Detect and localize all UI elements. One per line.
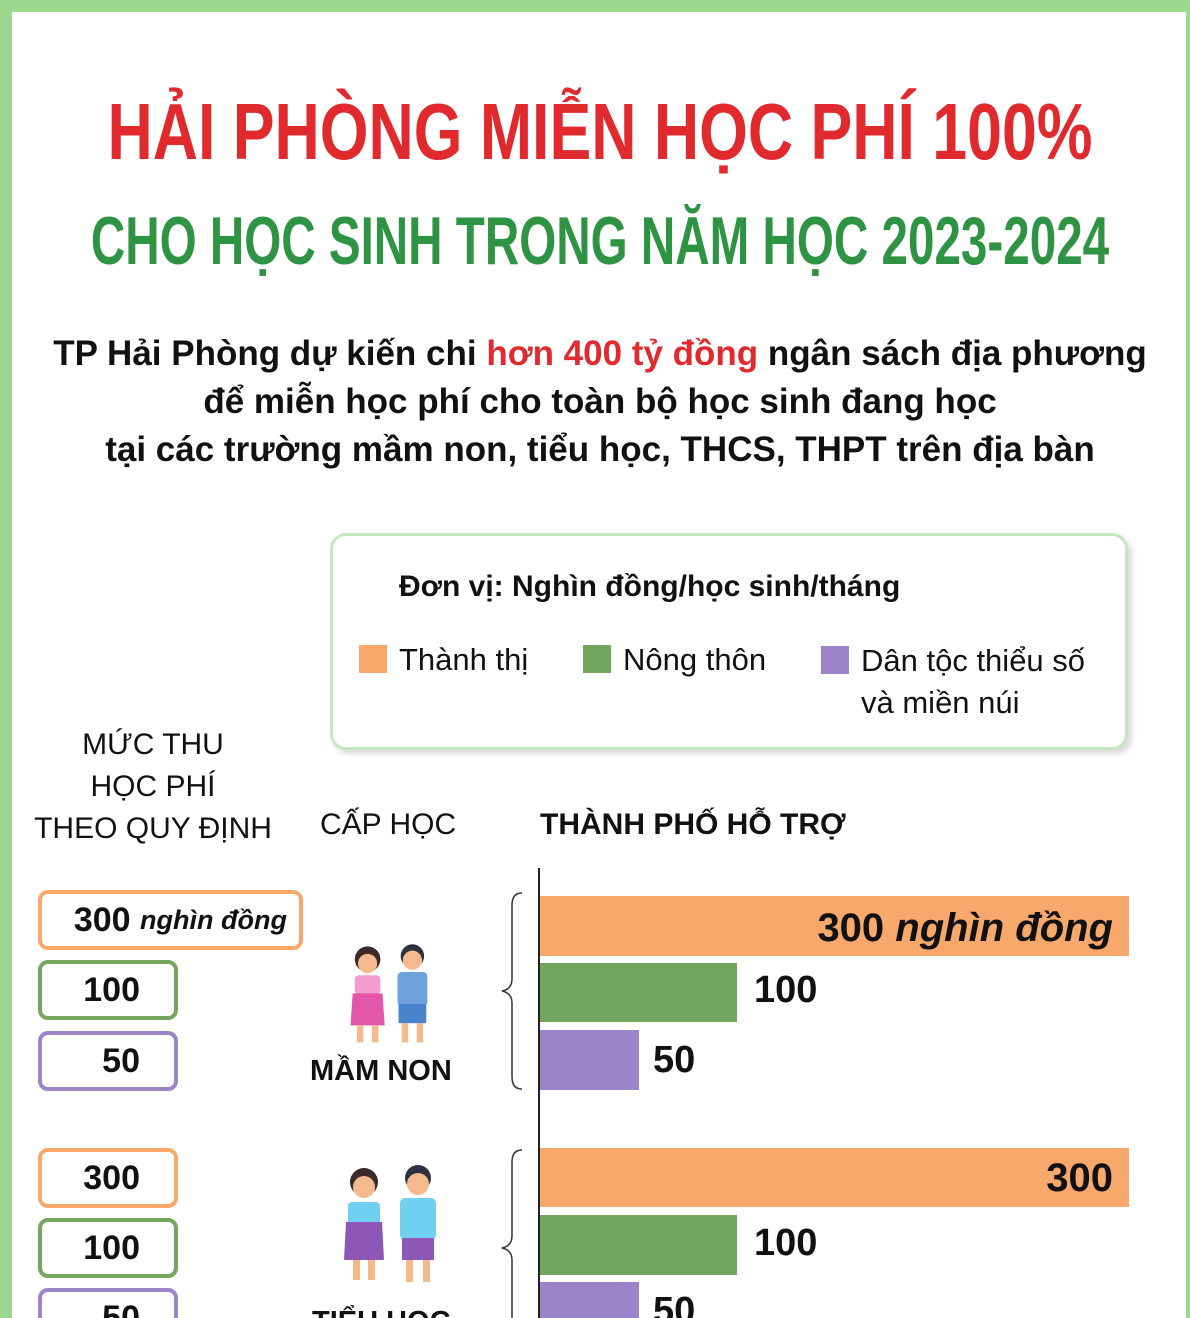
legend panel [330,533,1128,750]
brace [502,1149,522,1318]
unit note: Đơn vị: Nghìn đồng/học sinh/tháng [399,570,900,603]
bars [540,896,1129,956]
column head: fee: HỌC PHÍ [90,770,216,803]
subtitle: CHO HỌC SINH TRONG NĂM HỌC 2023-2024 [91,203,1109,279]
column head: fee [34,728,272,845]
intro text: tại các trường mầm non, tiểu học, THCS, THPT trên địa bàn [105,430,1095,469]
column head: fee: THEO QUY ĐỊNH [34,812,272,845]
column head: level: CẤP HỌC [320,808,456,841]
legend: ethnic mountain [821,643,1085,720]
icon: children [350,944,428,1042]
bars: 300 [1046,1156,1113,1200]
column head: fee: MỨC THU [82,728,224,761]
group: mam non: 100 [754,969,817,1011]
group: tieu hoc: 100 [754,1222,817,1264]
legend: rural: Nông thôn [623,642,766,677]
intro text: TP Hải Phòng dự kiến chi hơn 400 tỷ đồng ngân sách địa phương [53,334,1147,373]
bars [540,1148,1129,1207]
intro text [53,334,1147,469]
bars: 300 nghìn đồng [817,906,1113,950]
column head: support: THÀNH PHỐ HỖ TRỢ [540,808,846,841]
fee boxes: 300 [83,1158,140,1196]
fee boxes [38,890,303,950]
group: mam non: 50 [653,1039,695,1081]
frame border [0,0,1190,12]
fee boxes: nghìn đồng [140,904,287,934]
group: tieu hoc [38,1148,1129,1318]
group: mam non: 50 [102,1042,140,1080]
fee boxes [38,1148,178,1208]
group: mam non: 100 [83,970,140,1008]
axis line [538,868,540,1318]
legend: urban: Thành thị [399,642,528,677]
brace [502,892,522,1090]
legend: ethnic mountain: và miền núi [861,685,1020,720]
title: HẢI PHÒNG MIỄN HỌC PHÍ 100% [107,87,1093,176]
intro text: để miễn học phí cho toàn bộ học sinh đang học [203,382,997,421]
legend: ethnic mountain: Dân tộc thiểu số [861,643,1085,678]
level label: MẦM NON [310,1055,452,1087]
fee boxes: 300 [74,900,131,938]
group: tieu hoc: 100 [83,1228,140,1266]
icon: children [344,1165,436,1282]
group: mam non [38,890,1129,1091]
